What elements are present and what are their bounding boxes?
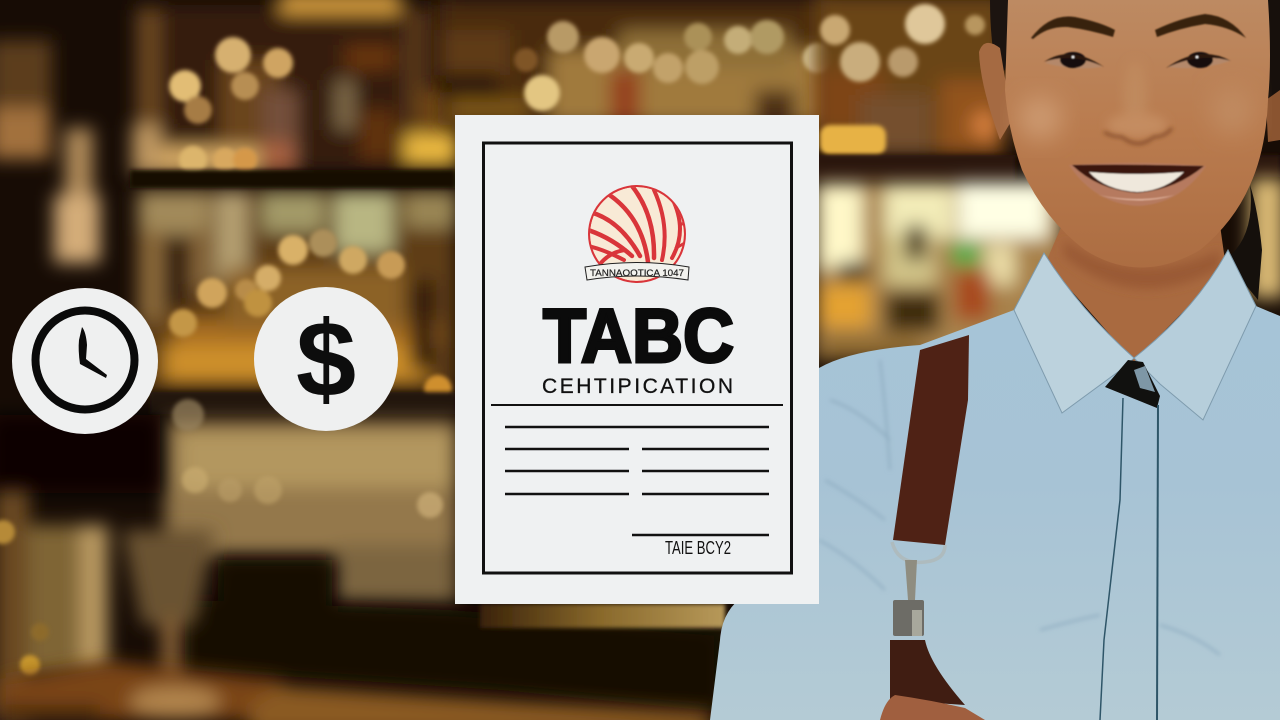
nose [1104, 113, 1172, 144]
middle dark shelf [130, 170, 455, 188]
second shelf [136, 190, 457, 390]
face [1005, 0, 1270, 268]
right bokeh [820, 4, 985, 155]
right upper shelf [815, 0, 1005, 155]
heading TABC: TABC [543, 294, 734, 379]
gold strip under card [480, 604, 725, 628]
glassware area [165, 420, 457, 603]
neck [1046, 225, 1226, 362]
form lines [491, 405, 783, 535]
bar counter [0, 662, 710, 720]
ear [979, 43, 1012, 140]
collar [1014, 250, 1256, 420]
left wall and bottle [0, 40, 100, 263]
lower apron strap [890, 640, 965, 705]
subheading: CEHTIPICATION [542, 375, 733, 398]
hair [990, 0, 1280, 300]
seal logo [585, 185, 690, 283]
dark counter block [0, 415, 720, 712]
placket [1100, 398, 1158, 720]
seal banner: TANNAOOTICA 1047 [590, 268, 684, 278]
upper shelf [132, 0, 458, 175]
person: bartender [710, 0, 1280, 720]
forearm hand [880, 695, 985, 720]
tie highlight [1134, 366, 1155, 392]
glass highlights [172, 399, 443, 518]
eyes [1044, 52, 1231, 68]
lower left bokeh [0, 520, 49, 675]
clock hands [79, 327, 107, 378]
sleeve folds [819, 360, 1220, 655]
signature caption: TAIE BCY2 [665, 538, 731, 558]
inner border [484, 143, 792, 573]
left lower glasses [0, 490, 215, 720]
dollar icon [254, 287, 398, 431]
tie knot [1105, 360, 1160, 408]
mouth [1069, 163, 1206, 206]
eyebrows [1031, 14, 1246, 39]
second shelf bokeh [169, 229, 452, 403]
right lower shelf [815, 178, 1280, 360]
dollar icon: $ [296, 298, 356, 419]
upper shelf bokeh [169, 37, 293, 174]
apron strap [893, 335, 969, 545]
dark band under shelf [150, 392, 455, 414]
clock icon [12, 288, 158, 434]
right edge shelf [1240, 155, 1280, 177]
top centre bokeh [514, 20, 833, 111]
metal clip [892, 542, 945, 636]
certificate card [455, 115, 819, 604]
top centre shelf behind card [440, 0, 830, 125]
shirt [710, 250, 1280, 720]
neck shadow [1064, 240, 1220, 289]
right ear [1266, 90, 1280, 142]
right dark shelf [815, 155, 1015, 180]
